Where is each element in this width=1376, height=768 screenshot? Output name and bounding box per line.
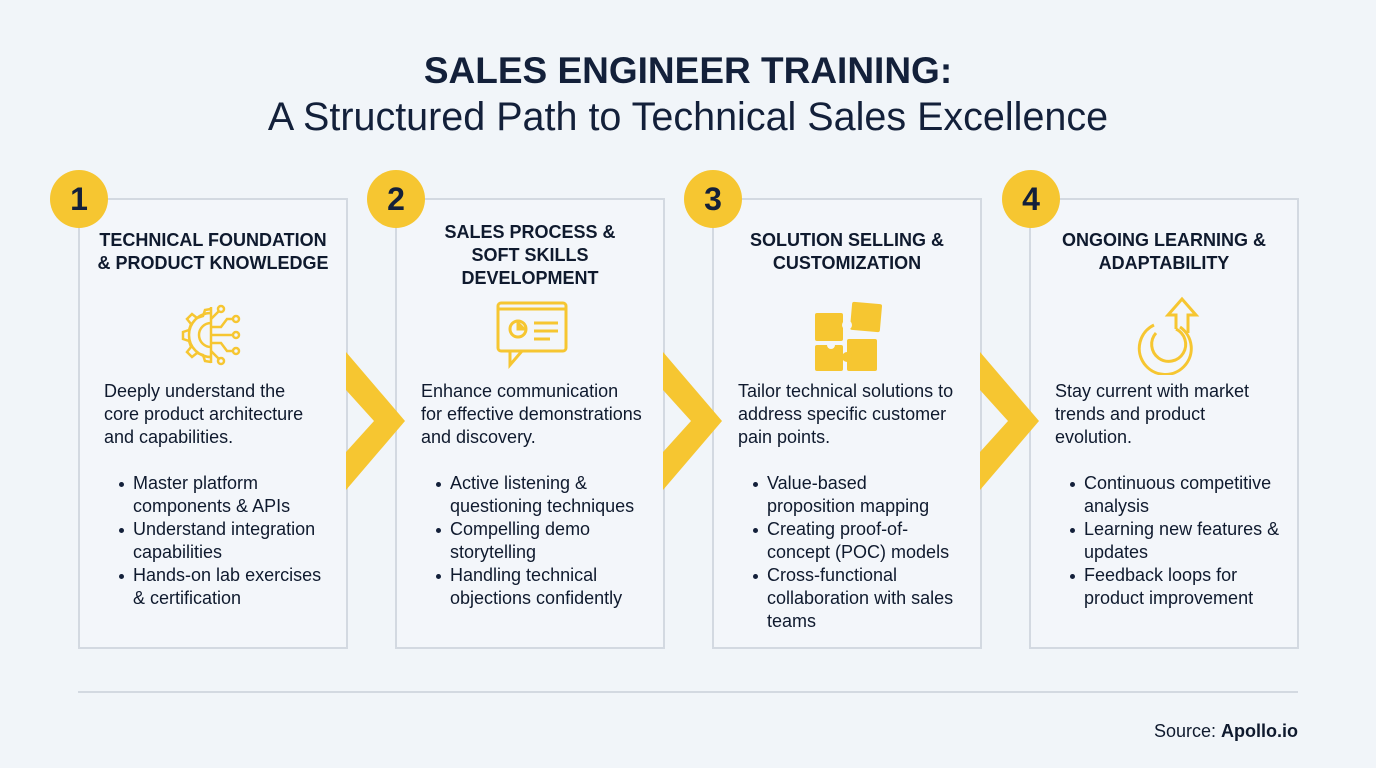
bullets 2: objections confidently	[450, 588, 622, 608]
bullets 1: capabilities	[133, 542, 222, 562]
bullets 3: Creating proof-of-	[767, 519, 908, 539]
bullets 1: components & APIs	[133, 496, 290, 516]
bullets 4	[1070, 473, 1279, 608]
bullets 1: Understand integration	[133, 519, 315, 539]
bullets 2: Active listening &	[450, 473, 587, 493]
arrow 3	[980, 352, 1039, 490]
heading 4: ONGOING LEARNING &	[1062, 230, 1266, 250]
panel: step 2	[395, 198, 665, 649]
arrow 2	[663, 352, 722, 490]
bullets 3	[753, 473, 953, 631]
bullets 4: product improvement	[1084, 588, 1253, 608]
bullets 2: Handling technical	[450, 565, 597, 585]
title: SALES ENGINEER TRAINING:	[424, 50, 952, 91]
bullets 2	[436, 473, 634, 608]
badge 1: 1	[70, 181, 88, 217]
heading 4: ADAPTABILITY	[1099, 253, 1229, 273]
heading 2: DEVELOPMENT	[461, 268, 598, 288]
heading 2: SOFT SKILLS	[472, 245, 588, 265]
text 3: pain points.	[738, 427, 830, 447]
bullets 1: & certification	[133, 588, 241, 608]
text 3: Tailor technical solutions to	[738, 381, 953, 401]
bullets 2: storytelling	[450, 542, 536, 562]
text 2: and discovery.	[421, 427, 536, 447]
heading 1: TECHNICAL FOUNDATION	[99, 230, 327, 250]
heading 3	[750, 230, 944, 273]
heading 3: CUSTOMIZATION	[773, 253, 921, 273]
text 1: Deeply understand the	[104, 381, 285, 401]
icon: puzzle	[815, 302, 882, 371]
text 4: trends and product	[1055, 404, 1205, 424]
bullets 3: teams	[767, 611, 816, 631]
bullets 4: Continuous competitive	[1084, 473, 1271, 493]
heading 1: & PRODUCT KNOWLEDGE	[98, 253, 328, 273]
bullets 4: Learning new features &	[1084, 519, 1279, 539]
text 1: and capabilities.	[104, 427, 233, 447]
bullets 3: collaboration with sales	[767, 588, 953, 608]
text 4: evolution.	[1055, 427, 1132, 447]
bullets 1: Master platform	[133, 473, 258, 493]
text 2: for effective demonstrations	[421, 404, 642, 424]
bullets 3: Cross-functional	[767, 565, 897, 585]
text 2: Enhance communication	[421, 381, 618, 401]
heading 2	[444, 222, 616, 288]
heading 3: SOLUTION SELLING &	[750, 230, 944, 250]
bullets 4: Feedback loops for	[1084, 565, 1237, 585]
bullets 2: Compelling demo	[450, 519, 590, 539]
text 1: core product architecture	[104, 404, 303, 424]
badge 4: 4	[1022, 181, 1040, 217]
bullets 3: Value-based	[767, 473, 867, 493]
icon: circular arrow	[1138, 296, 1200, 375]
badge 1	[50, 170, 108, 228]
source: Source: Apollo.io	[1154, 721, 1298, 741]
panel: step 3	[712, 198, 982, 649]
text 1	[104, 381, 303, 447]
badge 4	[1002, 170, 1060, 228]
icon: presentation	[496, 302, 568, 369]
text 4: Stay current with market	[1055, 381, 1249, 401]
text 2	[421, 381, 642, 447]
bullets 2: questioning techniques	[450, 496, 634, 516]
bullets 3: proposition mapping	[767, 496, 929, 516]
text 3	[738, 381, 953, 447]
text 3: address specific customer	[738, 404, 946, 424]
panel: step 1	[78, 198, 348, 649]
bullets 3: concept (POC) models	[767, 542, 949, 562]
panel: step 4	[1029, 198, 1299, 649]
subtitle: A Structured Path to Technical Sales Excellence	[268, 95, 1108, 139]
text 4	[1055, 381, 1249, 447]
arrow 1	[346, 352, 405, 490]
bullets 4: updates	[1084, 542, 1148, 562]
bullets 1: Hands-on lab exercises	[133, 565, 321, 585]
bullets 1	[119, 473, 321, 608]
badge 2	[367, 170, 425, 228]
badge 2: 2	[387, 181, 405, 217]
heading 2: SALES PROCESS &	[444, 222, 616, 242]
badge 3: 3	[704, 181, 722, 217]
bullets 4: analysis	[1084, 496, 1149, 516]
badge 3	[684, 170, 742, 228]
heading 1	[98, 230, 328, 273]
icon: gear circuit	[182, 304, 240, 366]
heading 4	[1062, 230, 1266, 273]
